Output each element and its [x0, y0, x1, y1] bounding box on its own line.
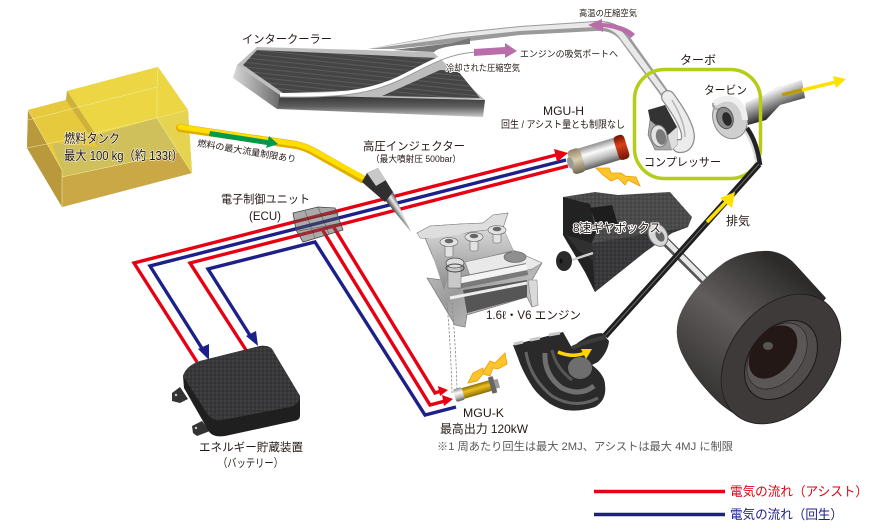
cool air arrow — [474, 43, 517, 58]
compressor — [648, 97, 688, 150]
fuel tank label — [64, 131, 183, 163]
electric lines — [134, 155, 568, 415]
ECU label: (ECU) — [249, 211, 281, 223]
exhaust pipe — [605, 164, 759, 336]
fuel tank — [27, 67, 192, 207]
exhaust flow arrow — [707, 202, 726, 222]
right foot — [528, 280, 538, 307]
intercooler — [233, 21, 672, 117]
MGU-K — [447, 303, 507, 404]
legend: assist: 電気の流れ（アシスト） — [730, 484, 868, 499]
exhaust arrow outlet — [782, 76, 846, 95]
second regen line — [208, 242, 456, 415]
regen line — [150, 160, 566, 350]
lightning — [468, 353, 507, 383]
fuel flow label: 燃料の最大流量制限あり — [197, 137, 297, 164]
MGU-H — [564, 134, 640, 186]
exhaust label: 排気 — [726, 213, 750, 228]
turbo labels: ターボ — [680, 53, 716, 67]
upper air pipe — [368, 21, 672, 100]
injector label: （最大噴射圧 500bar） — [371, 153, 461, 164]
lower air pipe — [280, 50, 476, 95]
rod and knob — [572, 253, 593, 260]
battery — [172, 346, 300, 436]
gearbox label: 8速ギヤボックス — [573, 221, 661, 235]
turbine — [707, 93, 760, 165]
MGU-H label: 回生 / アシスト量とも制限なし — [501, 118, 625, 131]
lower block — [463, 280, 527, 313]
assist to MGU-K outer — [322, 229, 445, 405]
second assist line — [190, 166, 568, 350]
left bank — [427, 228, 513, 290]
connector — [393, 38, 470, 52]
MGU-H label — [501, 104, 625, 131]
injector label: 高圧インジェクター — [363, 140, 465, 153]
assist to MGU-K inner — [333, 226, 441, 393]
turbo labels: タービン — [704, 84, 747, 97]
ECU — [293, 207, 343, 242]
air flow labels: 冷却された圧縮空気 — [446, 62, 520, 73]
camshaft — [457, 269, 527, 283]
top rail — [417, 213, 508, 240]
ECU label: 電子制御ユニット — [221, 192, 310, 206]
green flow arrow — [209, 131, 278, 148]
intake ports — [440, 226, 506, 257]
fuel tank label: 燃料タンク — [64, 131, 120, 146]
rotation arrow — [558, 352, 585, 355]
air flow labels: 高温の圧縮空気 — [579, 8, 637, 18]
ECU label — [221, 192, 310, 223]
air flow labels: エンジンの吸気ポートへ — [520, 48, 618, 59]
fuel pipe with flow arrow — [180, 127, 362, 179]
line arrowheads — [198, 149, 568, 406]
air flow labels — [446, 8, 637, 73]
turbo labels: コンプレッサー — [644, 156, 721, 169]
exhaust outlet pipe — [745, 80, 805, 125]
MGU-K label: 最高出力 120kW — [440, 422, 529, 436]
fuel tank label: 最大 100 kg（約 133ℓ） — [64, 148, 183, 163]
plug — [448, 264, 461, 288]
MGU-K label: MGU-K — [463, 406, 504, 420]
lightning — [596, 168, 640, 186]
right bank deck — [465, 250, 542, 281]
drive axle — [644, 220, 708, 284]
intercooler label: インタークーラー — [242, 33, 332, 46]
battery label — [199, 441, 304, 470]
tyre — [677, 251, 866, 447]
assist line to battery and MGU-H — [134, 155, 556, 362]
engine — [417, 213, 542, 327]
turbo ring — [634, 70, 760, 178]
gearbox — [556, 192, 692, 292]
MGU-K label — [440, 406, 529, 436]
footnote: ※1 周あたり回生は最大 2MJ、アシストは最大 4MJ に制限 — [437, 439, 733, 453]
engine label: 1.6ℓ・V6 エンジン — [486, 310, 581, 322]
injector label — [363, 140, 465, 164]
injector — [362, 168, 411, 232]
exhaust manifold — [513, 332, 609, 411]
battery label: エネルギー貯蔵装置 — [199, 441, 304, 454]
MGU-H label: MGU-H — [543, 104, 584, 118]
turbo labels — [644, 53, 747, 169]
battery label: （バッテリー） — [218, 457, 283, 470]
manifold bolts — [514, 333, 560, 344]
hot air arrow — [588, 19, 635, 38]
legend: regeneration: 電気の流れ（回生） — [730, 507, 843, 522]
